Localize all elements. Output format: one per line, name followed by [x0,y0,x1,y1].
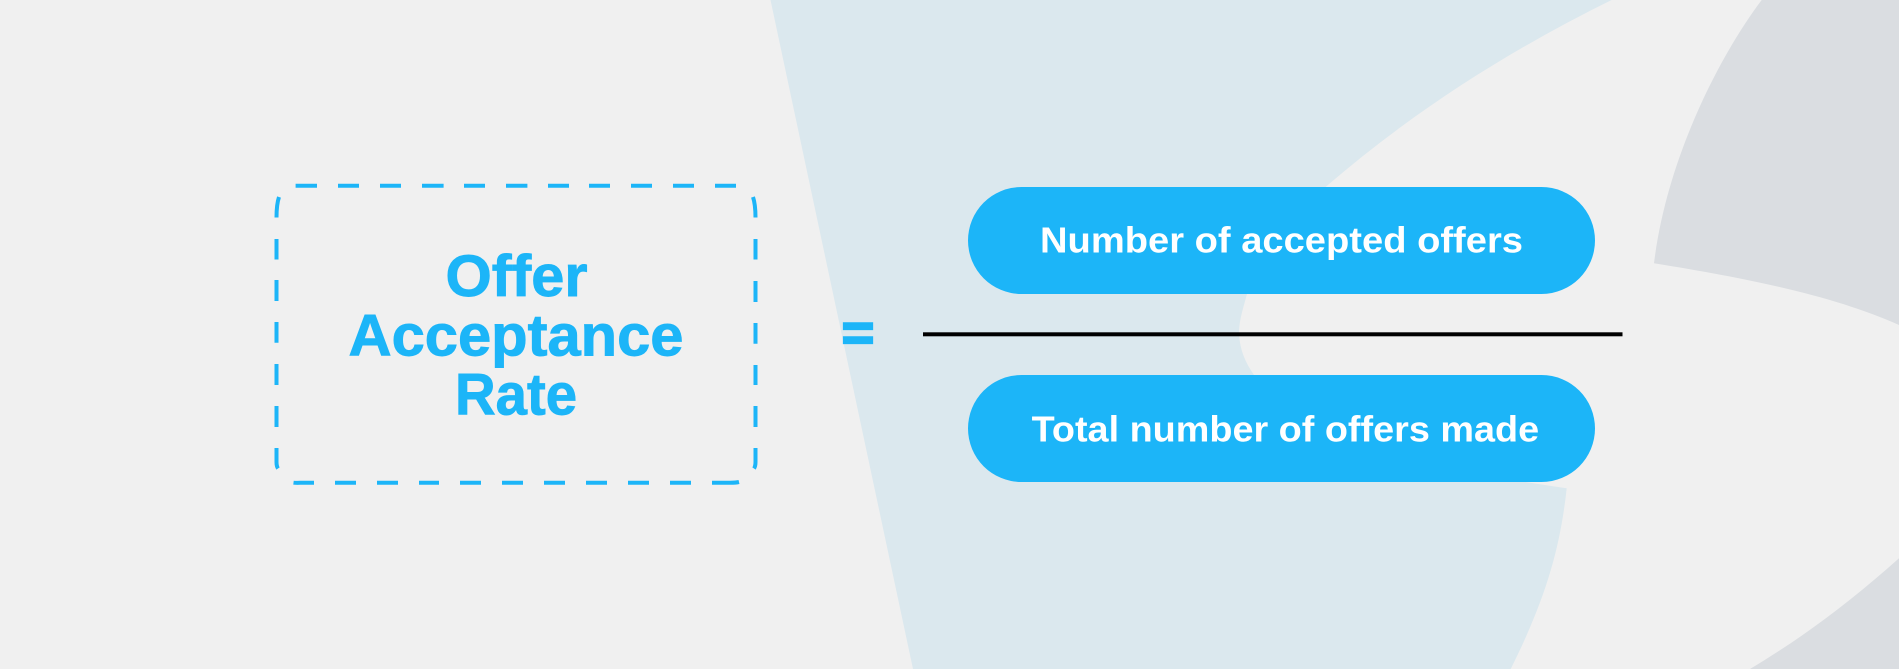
heading: Offer Acceptance Rate: Acceptance [348,304,684,368]
dashed box: metric name [276,186,756,483]
heading: Offer Acceptance Rate: Rate [455,362,577,428]
background shape: light blue swoosh [770,0,1612,669]
background shape: gray swoosh top right [1654,0,1899,325]
pill: numerator [968,187,1595,294]
background shape: gray swoosh bottom right [1750,558,1899,669]
heading: Offer Acceptance Rate: Offer [446,244,588,309]
pill: numerator: Number of accepted offers [1040,220,1523,261]
heading: Offer Acceptance Rate [348,244,684,428]
pill: denominator [968,375,1595,482]
equals sign: = [842,304,874,362]
fraction line [923,332,1622,336]
pill: denominator: Total number of offers made [1032,409,1539,450]
